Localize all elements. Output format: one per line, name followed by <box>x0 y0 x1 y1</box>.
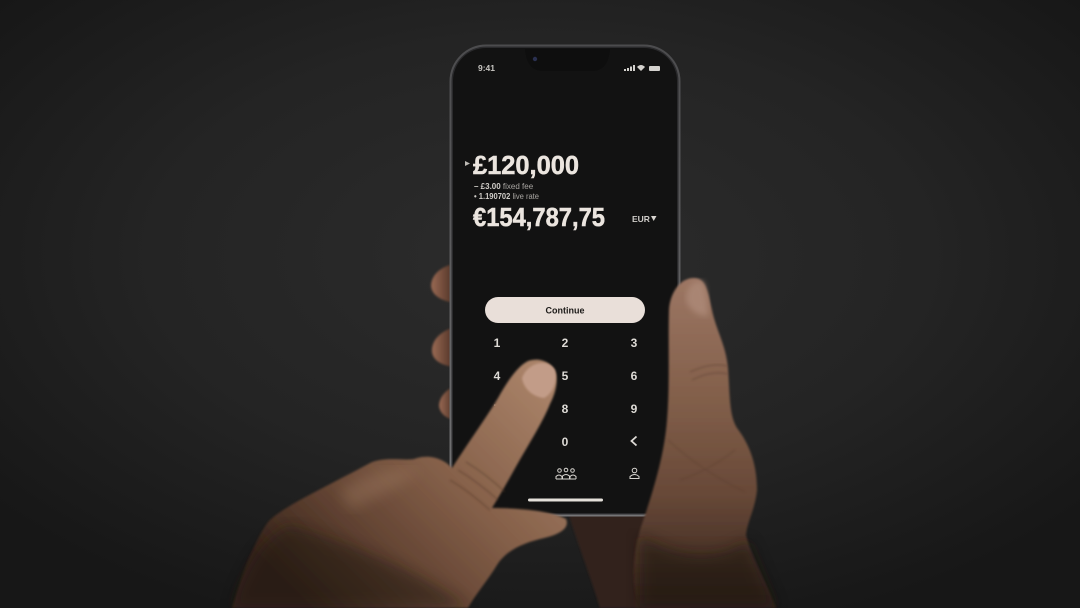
keypad: 3 <box>631 336 638 350</box>
continue button: Continue <box>546 306 584 316</box>
phone body <box>450 46 680 516</box>
home indicator <box>528 498 603 502</box>
keypad: 1 <box>494 336 501 350</box>
notch <box>525 49 610 71</box>
camera <box>533 57 537 61</box>
hand: right hand palm behind phone <box>568 512 690 608</box>
fee line: – £3.00 fixed fee <box>474 182 534 191</box>
palm shadow <box>640 535 776 608</box>
phone screen <box>453 48 677 513</box>
keypad: 0 <box>562 435 569 449</box>
hand: fingers behind phone <box>431 264 455 420</box>
finger knuckle creases <box>450 462 505 510</box>
amount: source: £120,000 <box>473 150 579 180</box>
keypad: 6 <box>631 369 638 383</box>
keypad: 8 <box>562 402 569 416</box>
status time: 9:41 <box>478 63 495 73</box>
thumb knuckle crease <box>690 365 728 380</box>
phone <box>450 46 680 516</box>
keypad: 2 <box>562 336 569 350</box>
amount: converted: €154,787,75 <box>473 202 605 232</box>
keypad <box>494 336 638 449</box>
hand: right hand and thumb <box>634 278 776 608</box>
keypad: 9 <box>631 402 638 416</box>
hand: left hand with pointing finger <box>232 360 567 608</box>
keypad: 4 <box>494 369 501 383</box>
continue button <box>485 297 645 323</box>
keypad: 7 <box>494 402 501 416</box>
keypad: 5 <box>562 369 569 383</box>
thumb nail <box>686 281 708 316</box>
icon: backspace chevron <box>632 436 636 446</box>
status icons <box>624 65 660 71</box>
knuckle shadow <box>232 525 470 608</box>
currency selector: EUR <box>632 214 650 224</box>
icon: group <box>556 468 576 479</box>
hand ridge highlight <box>340 469 420 510</box>
fingernail <box>522 363 556 398</box>
rate line: • 1.190702 live rate <box>474 192 540 201</box>
icon: profile <box>630 468 639 478</box>
palm lines <box>668 440 745 492</box>
